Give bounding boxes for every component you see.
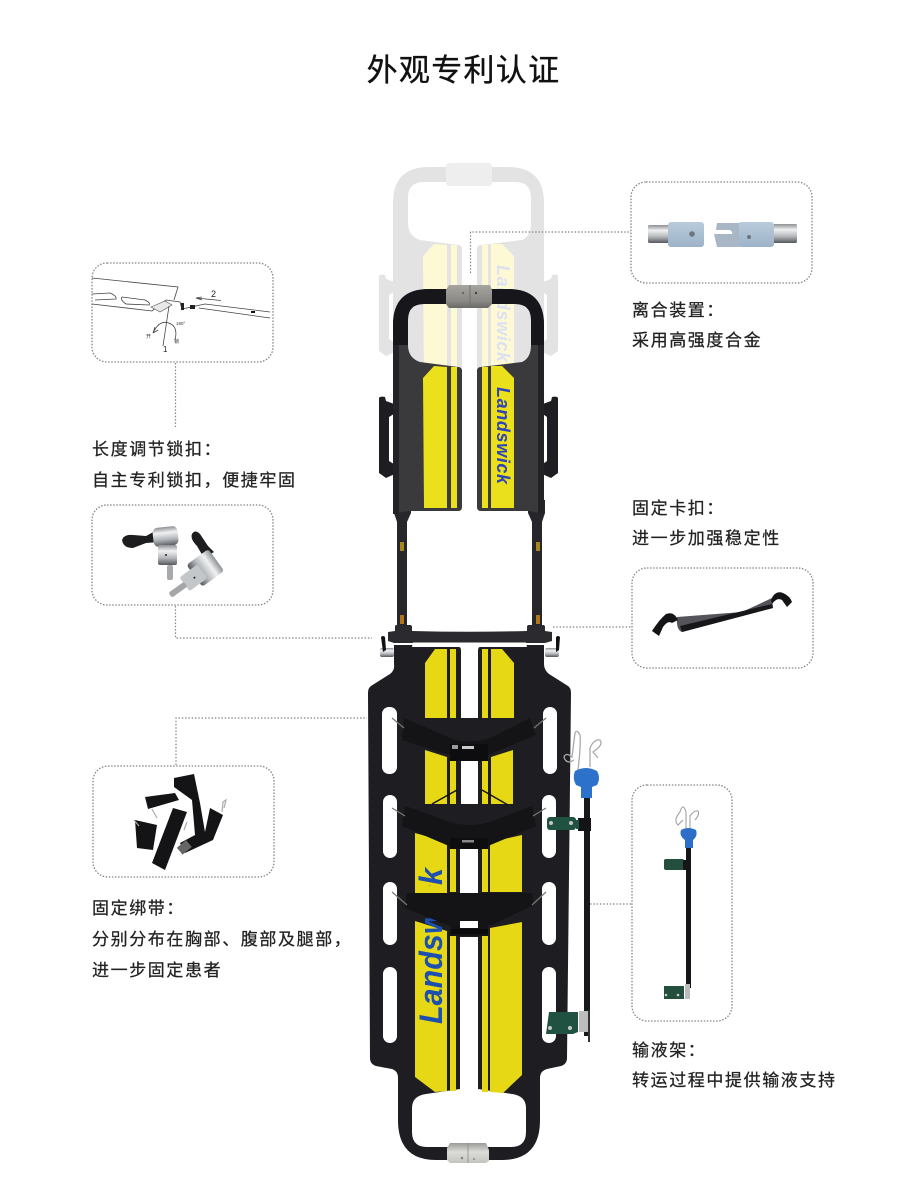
connector: separation device to latch (470, 232, 631, 273)
panel: separation device (631, 182, 812, 283)
drawing: lock mechanism diagram: 开 (146, 334, 151, 340)
connector: length lock drawing to label (174, 363, 176, 427)
connector: IV panel to IV pole (590, 903, 632, 905)
text block: length lock: 自主专利锁扣，便捷牢固 (92, 471, 297, 490)
drawing: lock mechanism diagram: 2 (211, 289, 216, 299)
yellow reflective panels: head (423, 366, 514, 508)
telescopic tubes (394, 500, 545, 630)
windows and slots (382, 642, 557, 1147)
icon: lever bolt right (161, 532, 224, 605)
text block: IV pole: 转运过程中提供输液支持 (632, 1071, 837, 1090)
clamp: upper (547, 817, 591, 831)
ghost stretcher head: extended position (379, 163, 558, 392)
side handles (379, 397, 558, 478)
hooks (564, 731, 601, 770)
IV pole mounted on stretcher (546, 731, 601, 1042)
levers on neck (380, 636, 560, 657)
latch: head (446, 285, 492, 308)
drawing: lock mechanism diagram (92, 278, 270, 354)
yellow patch hiding letter under strap (415, 886, 447, 893)
text block: length lock: 长度调节锁扣： (92, 440, 222, 459)
head frame (393, 289, 544, 514)
text block: IV pole (632, 1041, 837, 1090)
cross cords (432, 790, 508, 805)
brand: lower board: Landswick (413, 866, 449, 1024)
ghost stretcher head: extended position: Landswick (493, 265, 513, 363)
stretcher: upper head section (379, 285, 558, 630)
text block: separation device (632, 301, 762, 350)
icon: straps (134, 774, 226, 870)
text block: fixing clip (632, 499, 781, 548)
icon: lever bolt left (122, 526, 179, 580)
strap: leg (392, 892, 546, 936)
panel: length lock drawing (92, 263, 273, 362)
knob (574, 768, 599, 798)
connector: lever bolts to stretcher (176, 606, 372, 638)
latch: foot (447, 1143, 489, 1163)
text block: fixing straps (92, 899, 352, 980)
connector: strap panel to stretcher (176, 718, 367, 765)
stretcher: lower main board (368, 625, 571, 1163)
panel: fixing clip (632, 568, 813, 668)
text block: fixing clip: 进一步加强稳定性 (632, 529, 781, 548)
yellow reflective panels: lower board (415, 649, 522, 1093)
brand: head: Landswick (493, 387, 513, 485)
icon: clip (652, 592, 792, 636)
panel: IV pole (632, 785, 732, 1021)
title: 外观专利认证 (367, 53, 560, 88)
connector: clip to crossbar (553, 626, 632, 628)
drawing: lock mechanism diagram: 锁 (174, 338, 179, 345)
text block: separation device: 离合装置： (632, 301, 725, 320)
icon: IV pole (664, 807, 699, 999)
clamp: lower (546, 1010, 590, 1042)
text block: IV pole: 输液架： (632, 1041, 706, 1060)
text block: fixing clip: 固定卡扣： (632, 499, 725, 518)
drawing: lock mechanism diagram: 180° (176, 321, 186, 326)
panel: lever bolts (92, 505, 273, 605)
text block: length lock (92, 440, 297, 490)
drawing: lock mechanism diagram: 1 (163, 345, 168, 354)
pole (584, 796, 590, 1036)
strap: chest (392, 718, 546, 761)
text block: fixing straps: 固定绑带： (92, 899, 185, 918)
text block: separation device: 采用高强度合金 (632, 331, 762, 350)
icon: coupling pieces (648, 222, 797, 247)
crossbar (388, 625, 552, 643)
text block: fixing straps: 进一步固定患者 (92, 961, 222, 980)
text block: fixing straps: 分别分布在胸部、腹部及腿部， (92, 930, 352, 949)
strap: abdomen (392, 806, 546, 849)
panel: fixing straps (93, 766, 274, 877)
